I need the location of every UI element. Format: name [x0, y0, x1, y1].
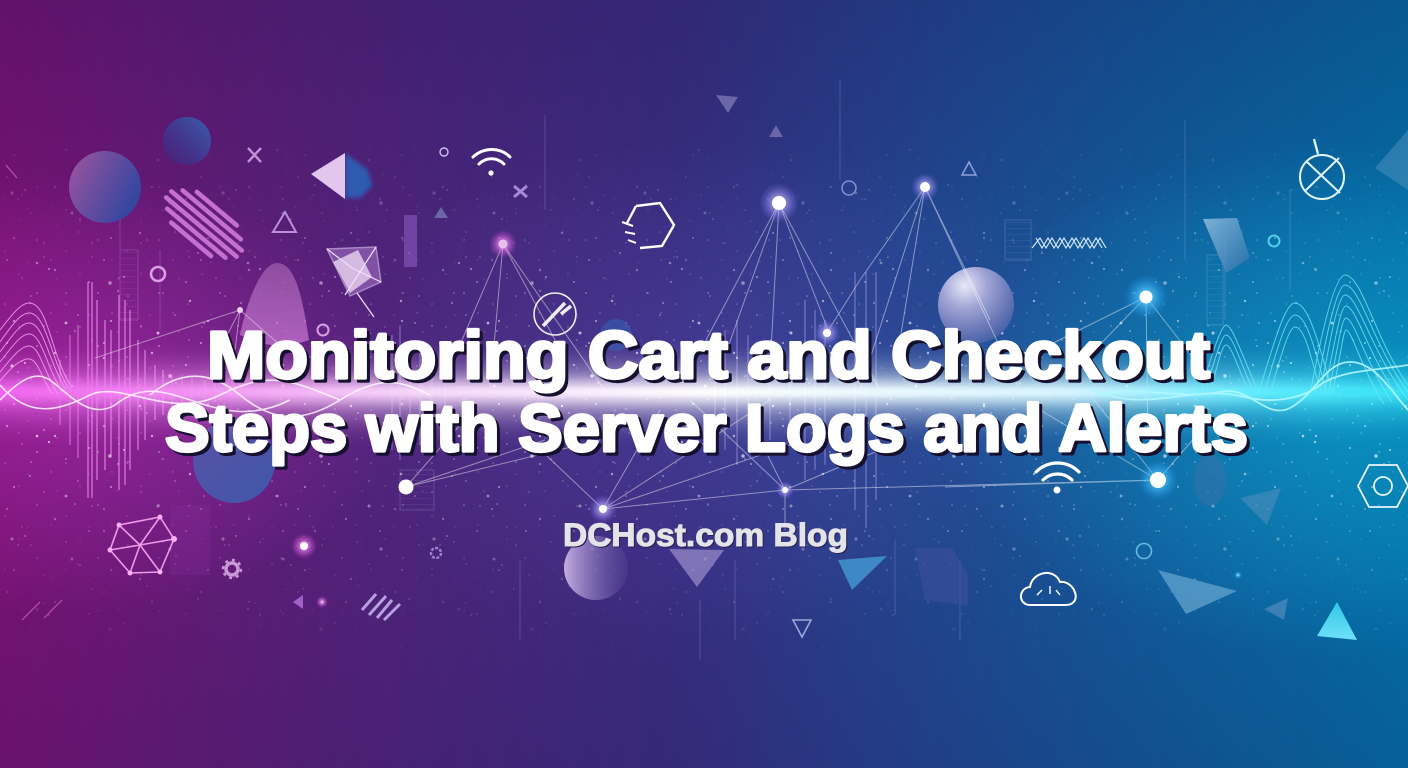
icon: cloud — [1021, 573, 1076, 605]
icon: outlined triangle — [273, 212, 296, 232]
shape: silver sphere — [938, 267, 1014, 343]
node: lower right — [1138, 460, 1178, 500]
faint data columns — [120, 80, 1290, 660]
icon: cyan ring low — [1136, 544, 1152, 558]
shape: blue fold triangle — [838, 556, 887, 590]
shape: diagonal stripes — [362, 594, 400, 620]
icon: faceted kite — [327, 247, 381, 317]
title — [165, 318, 1248, 466]
shape: faint corner triangle — [1375, 130, 1408, 190]
shape: cyan triangle — [1317, 602, 1357, 640]
shape: blue spot — [600, 319, 632, 351]
node: centre — [814, 320, 840, 346]
node: lower centre-left — [589, 495, 617, 523]
icon: broken hexagon — [622, 203, 674, 248]
shape: gradient sphere — [69, 151, 141, 223]
shape: pink blob — [240, 263, 309, 345]
icon: small ring 2 — [318, 324, 328, 336]
network lines — [95, 187, 1210, 530]
icon: diagonal ticks — [6, 165, 62, 620]
node: right bright — [1124, 275, 1168, 319]
panel: decorative shapes, left — [6, 117, 417, 620]
icon: small cross — [514, 186, 527, 197]
shape: blue triangle right — [1240, 488, 1281, 525]
subtitle: DCHost.com Blog — [563, 517, 848, 553]
chart: white centre-left waves — [0, 376, 430, 416]
node: top right — [911, 173, 939, 201]
chart: left waves — [0, 303, 70, 394]
shape: dark blue sphere — [163, 117, 211, 165]
shape: small blue triangle — [1264, 598, 1288, 620]
shape: blue sphere under title — [193, 419, 275, 503]
icon: cyan ring — [1268, 236, 1280, 246]
shape: faint block — [915, 548, 968, 606]
chart: left frequency bars — [60, 282, 215, 498]
shape: lower pale sphere — [564, 536, 628, 600]
title line 2: Steps with Server Logs and Alerts — [165, 391, 1248, 466]
shape: striped disc — [156, 179, 252, 269]
shape: blue hexagon half — [345, 153, 372, 198]
star field — [4, 145, 1408, 638]
icon: ring — [842, 181, 856, 195]
shape: light triangle — [311, 153, 345, 199]
node: small purple — [316, 596, 328, 608]
icon: cross mark — [248, 148, 261, 162]
shape: dark ellipse right — [1194, 454, 1226, 506]
chart: centre frequency bars — [392, 272, 876, 528]
icon: small gear — [431, 548, 441, 558]
node: cyan spark — [1234, 571, 1242, 579]
icon: small ring — [151, 267, 165, 281]
icon: crossed circle — [1300, 139, 1344, 199]
panel: decorative shapes, centre — [431, 95, 1014, 637]
node: left wave hub — [237, 307, 243, 313]
icon: left arrow triangle — [293, 595, 303, 609]
title line 1: Monitoring Cart and Checkout — [207, 318, 1210, 393]
node: lower left — [398, 480, 414, 494]
icon: wifi top — [473, 150, 510, 176]
icon: small ring top — [440, 148, 448, 156]
node: bottom left glow — [291, 533, 317, 559]
icon: hexagon badge — [1358, 465, 1408, 507]
network nodes — [237, 173, 1242, 608]
icon: small triangles — [434, 95, 783, 218]
icon: wifi lower — [1036, 463, 1079, 494]
shape: light quadrilateral — [1203, 218, 1250, 273]
chart: right waves — [1200, 275, 1408, 404]
panel: decorative shapes, right — [1021, 130, 1408, 640]
icon: gear — [223, 560, 241, 578]
icon: wrench badge — [534, 293, 576, 335]
icon: polygon network — [108, 514, 177, 576]
waveform glow band — [0, 370, 1408, 416]
node: top centre — [759, 183, 799, 223]
icon: outlined triangle right — [962, 162, 976, 175]
chart: bright cyan waves — [1090, 362, 1408, 411]
shape: pale blue triangle — [1158, 570, 1237, 614]
node: upper left — [489, 230, 517, 258]
shape: checker triangle — [669, 549, 724, 587]
shape: purple bar — [404, 215, 417, 267]
icon: outlined triangle low — [793, 620, 811, 637]
node: lower centre — [776, 481, 794, 499]
icon: zigzag chain — [1032, 238, 1106, 248]
